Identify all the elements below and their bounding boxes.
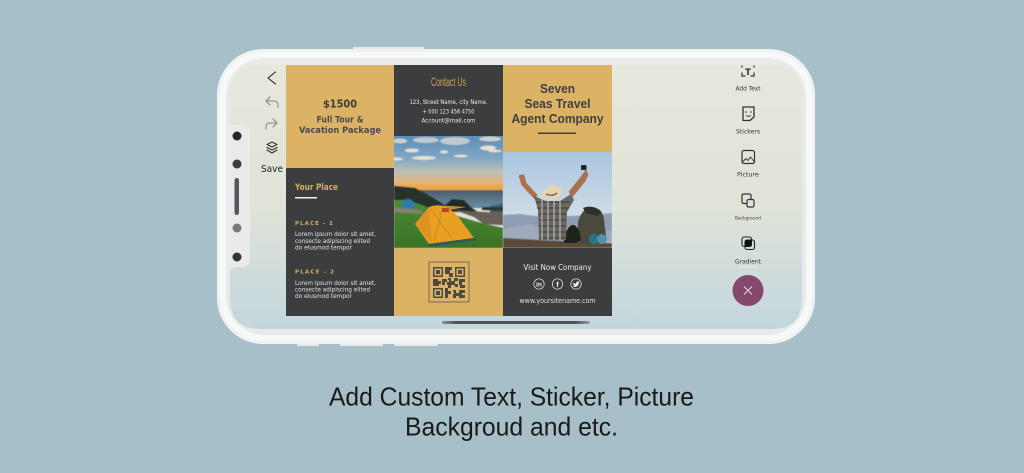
tool: background: Background <box>735 216 761 222</box>
panel: your place: PLACE - 2 <box>295 270 334 276</box>
panel: visit now: Visit Now Company <box>524 263 592 272</box>
photo: tent at sunset <box>389 136 503 248</box>
arms <box>519 175 537 199</box>
backpack <box>577 207 606 244</box>
caption <box>329 382 694 442</box>
panel: contact <box>394 65 503 136</box>
tool: background <box>735 194 761 222</box>
close button <box>732 275 764 306</box>
home indicator <box>442 321 590 324</box>
phone side buttons <box>297 47 438 346</box>
tool: gradient <box>735 237 761 268</box>
panel: your place: consecte adipiscing elited <box>295 239 370 245</box>
panel: your place: Lorem ipsum dolor sit amet, <box>295 281 376 287</box>
save label: Save <box>261 164 283 175</box>
caption: Add Custom Text, Sticker, Picture <box>329 382 694 412</box>
panel: your place: PLACE - 1 <box>295 221 333 227</box>
shirt <box>534 194 574 240</box>
caption: Backgroud and etc. <box>405 412 618 442</box>
tool: stickers: Stickers <box>736 128 761 136</box>
icon: undo <box>266 97 278 107</box>
icon: twitter <box>571 279 581 289</box>
left toolbar <box>266 72 278 153</box>
panel: your place: do eiusmod tempor <box>295 246 353 252</box>
panel: your place <box>286 168 394 316</box>
panel: your place: Lorem ipsum dolor sit amet, <box>295 232 376 238</box>
tool: gradient: Gradient <box>735 258 761 266</box>
panel: company title: Agent Company <box>512 111 604 126</box>
panel: qr code <box>394 248 503 316</box>
tool: add text: Add Text <box>736 84 761 92</box>
right toolbar <box>732 66 764 306</box>
panel: price: Full Tour & <box>316 116 364 126</box>
panel: contact: + 000 123 456 4750 <box>422 110 475 116</box>
tool: picture: Picture <box>737 170 759 178</box>
phone body <box>217 49 815 344</box>
phone mockup <box>217 47 815 346</box>
panel: price: $1500 <box>323 98 357 110</box>
panel: company title <box>503 65 612 152</box>
flyer <box>286 65 612 316</box>
phone screen <box>230 65 802 329</box>
panel: company title: Seven <box>540 81 575 96</box>
icon: facebook: f <box>556 280 559 289</box>
tool: stickers <box>736 107 761 136</box>
panel: your place: consecte adipiscing elited <box>295 288 370 294</box>
photo: traveller <box>503 152 612 248</box>
panel: contact: 123, Street Name, city Name. <box>410 100 488 106</box>
icon: redo <box>266 119 277 129</box>
panel: visit now: www.yoursitename.com <box>520 297 596 305</box>
panel: contact: Contact Us <box>431 77 466 89</box>
tool: add text <box>736 66 761 92</box>
panel: contact: Account@mail.com <box>422 118 476 124</box>
icon: back chevron <box>268 72 276 84</box>
icon: linkedin: in <box>536 282 542 288</box>
notch sensors <box>232 132 242 262</box>
panel: visit now <box>503 248 612 316</box>
panel: price <box>286 65 394 168</box>
tool: add text: T <box>745 68 751 78</box>
panel: your place: Your Place <box>294 183 338 193</box>
panel: your place: do eiusmod tempor <box>295 294 353 300</box>
panel: price: Vacation Package <box>299 126 381 136</box>
hat <box>541 185 562 200</box>
panel: company title: Seas Travel <box>524 96 590 111</box>
icon: layers <box>267 142 277 153</box>
tool: picture <box>737 150 759 178</box>
